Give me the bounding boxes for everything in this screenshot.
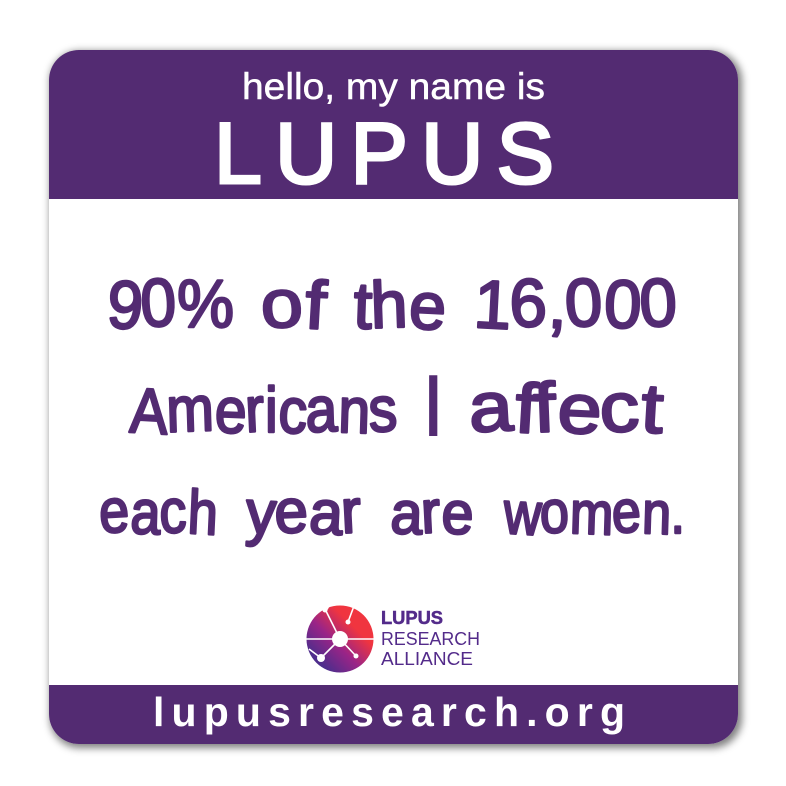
line 3 xyxy=(97,477,685,549)
line 3: each xyxy=(97,477,220,549)
footer url: lupusresearch.org xyxy=(153,689,625,735)
logo wordmark: LUPUS xyxy=(381,608,443,628)
statement text xyxy=(97,264,685,549)
line 2: Americans xyxy=(128,372,399,448)
logo wordmark: ALLIANCE xyxy=(381,649,473,669)
card xyxy=(49,50,738,744)
line 1: the xyxy=(353,267,448,344)
line 1: 16,000 xyxy=(472,264,679,344)
line 1: of xyxy=(259,265,328,344)
icon: logo disc xyxy=(306,604,374,672)
footer band xyxy=(49,685,738,744)
line 3: women. xyxy=(501,478,685,548)
line 2: I xyxy=(421,356,445,455)
logo: Lupus Research Alliance xyxy=(306,604,480,672)
line 3: year xyxy=(244,477,363,549)
heading: LUPUS: LUPUS xyxy=(214,106,554,202)
line 1 xyxy=(105,264,679,344)
heading: hello, my name is: hello, my name is xyxy=(242,66,545,107)
line 3: are xyxy=(390,478,475,547)
line 1: 90% xyxy=(105,264,234,344)
logo wordmark xyxy=(381,608,480,669)
logo wordmark: RESEARCH xyxy=(381,629,480,649)
line 2 xyxy=(128,356,665,455)
line 2: affect xyxy=(467,367,665,449)
header band xyxy=(49,50,738,199)
card shadow xyxy=(50,51,742,748)
